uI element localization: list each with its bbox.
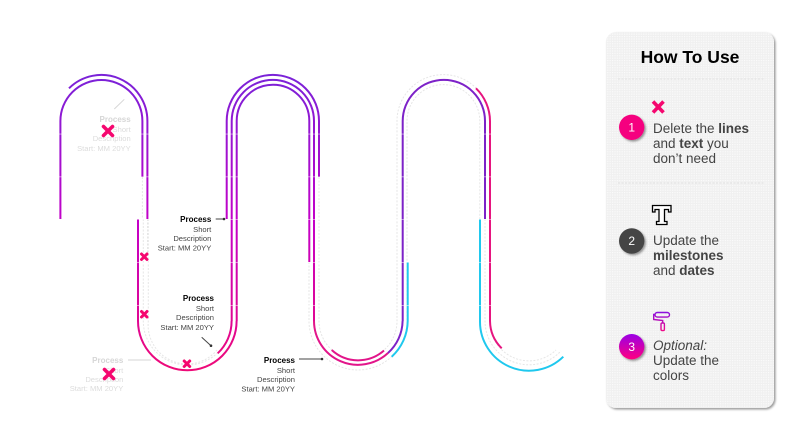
milestone: faded bottom process: Process <box>92 356 124 365</box>
step 2 text: milestones <box>653 248 724 263</box>
milestone: process at arch two <box>158 215 225 252</box>
milestone: faded top process: Short <box>113 125 132 134</box>
step 1 badge <box>619 115 644 140</box>
process line: first U-bend <box>138 219 237 370</box>
milestone: process at second bend: Start: MM 20YY <box>241 384 295 394</box>
delete marks <box>104 126 190 378</box>
milestone: process inside first bend: Start: MM 20YY <box>160 323 214 332</box>
milestone: faded bottom process <box>70 356 151 393</box>
step 2 text: and dates <box>653 263 715 278</box>
step 3 badge <box>619 334 644 359</box>
step 3 text: Optional: <box>653 338 707 353</box>
milestone: process inside first bend: Process <box>183 294 215 303</box>
milestone: process inside first bend: Short <box>196 304 215 313</box>
step 2 badge: 2 <box>628 234 635 248</box>
step 3 text: colors <box>653 368 689 383</box>
milestone: faded top process <box>77 99 132 153</box>
icon: paint roller <box>654 312 670 331</box>
milestone: faded bottom process: Short <box>105 366 124 375</box>
milestone: process at second bend <box>241 356 323 394</box>
milestone: process inside first bend <box>160 294 215 347</box>
step 1 badge: 1 <box>628 120 635 134</box>
milestone: process at arch two: Start: MM 20YY <box>158 244 211 252</box>
milestone: process at second bend: Short <box>277 366 296 375</box>
step 1 text: and text you <box>653 136 729 151</box>
panel background <box>606 32 774 408</box>
process line: final cyan curve <box>480 219 563 371</box>
milestone: process at second bend: Description <box>257 375 295 384</box>
step 2 text: Update the <box>653 233 719 248</box>
heading: How To Use <box>641 47 740 67</box>
panel: how to use <box>606 32 774 408</box>
icon: text T <box>652 206 671 224</box>
milestone: faded top process: Start: MM 20YY <box>77 144 131 153</box>
milestone: faded bottom process: Start: MM 20YY <box>70 384 123 393</box>
step 3 badge: 3 <box>628 340 635 354</box>
milestone: process at arch two: Description <box>173 234 211 243</box>
step 1 text: Delete the lines <box>653 121 749 136</box>
milestone: faded bottom process: Description <box>85 375 123 384</box>
step 2 badge <box>619 228 644 254</box>
milestone: faded top process: Description <box>93 134 131 143</box>
process line: third arch <box>403 80 502 348</box>
step 3 text: Update the <box>653 353 719 368</box>
milestone: process inside first bend: Description <box>176 313 214 322</box>
milestone: process at arch two: Process <box>180 215 212 224</box>
gray deleted track guides <box>142 75 561 370</box>
milestone: process at second bend: Process <box>264 356 296 365</box>
milestone tick marks <box>58 134 495 306</box>
process line: second arch <box>227 75 319 321</box>
process line: second U-bend <box>314 262 408 365</box>
step 1 text: don’t need <box>653 151 716 166</box>
icon: delete x <box>653 102 664 112</box>
milestone: process at arch two: Short <box>193 225 212 234</box>
process line: first arch <box>60 75 147 219</box>
milestone: faded top process: Process <box>100 115 131 124</box>
